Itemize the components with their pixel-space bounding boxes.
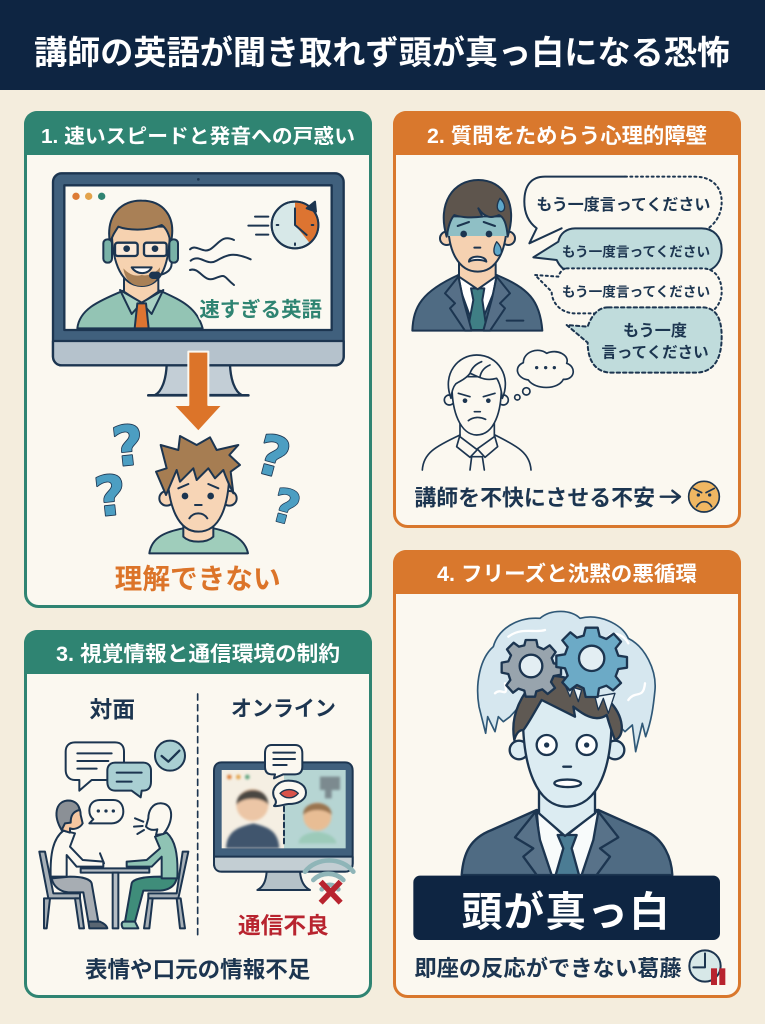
icon: question marks: ? [250,422,297,492]
icon: online monitor [214,745,353,890]
panel 4 illustration [413,611,725,985]
icon: question marks: ? [91,463,130,530]
arrow: to angry face [661,491,680,503]
black bar: mind goes blank [413,876,720,940]
panel 4 heading: 4. フリーズと沈黙の悪循環 [437,562,697,586]
speech bubble 1: もう一度言ってください [536,195,710,214]
icon: angry face [689,481,719,512]
panel 3: visual and network constraints [24,630,372,996]
panel 1: speed and pronunciation [24,111,372,606]
speech bubble 3: もう一度言ってください [562,285,710,300]
panel 3 illustration [39,694,353,982]
panel 2 illustration [412,177,722,512]
icon: anxious learner [412,180,542,331]
icon: paused clock [689,950,725,985]
icon: question marks: ? [109,413,147,480]
icon: question marks: ? [265,479,306,538]
icon: instructor with headset [77,201,203,328]
icon: frozen brain [478,611,655,752]
panel 2 heading: 2. 質問をためらう心理的障壁 [427,125,707,148]
icon: suit and collar [462,810,672,875]
panel 1 illustration [53,173,344,594]
label: cannot understand: 理解できない [115,563,281,594]
speech bubble 3 [535,268,722,313]
label: face to face: 対面 [90,696,135,722]
icon: question marks [91,413,306,538]
icon: sound waves [190,238,251,285]
icon: thought cloud [515,350,573,400]
label: lack of facial information: 表情や口元の情報不足 [85,956,311,982]
icon: gears [502,628,627,697]
icon: displeased instructor [422,355,531,470]
label: online: オンライン [231,697,336,721]
speech bubble 4 [567,307,722,373]
label: inability to react immediately: 即座の反応ができない葛藤 [414,955,682,981]
label: too fast English: 速すぎる英語 [199,298,322,322]
icon: weak wifi with cross [305,860,353,903]
panel 4: freeze and silence [393,550,741,996]
title banner [0,0,765,90]
speech bubble 4: もう一度 [623,321,687,340]
title banner: 講師の英語が聞き取れず頭が真っ白になる恐怖 [34,34,730,71]
label: fear of displeasing the instructor: 講師を不快にさせる不安 [414,485,655,510]
speech bubble 2 [533,228,722,270]
icon: blank-faced person [510,676,624,836]
speech bubble 1 [524,177,722,243]
icon: two people at a table [39,800,188,928]
panel 1 heading: 1. 速いスピードと発音への戸惑い [41,125,355,148]
label: poor connection: 通信不良 [238,912,329,938]
icon: fast clock [248,202,319,248]
speech bubble 4: 言ってください [601,344,709,361]
panel 2: psychological barrier [393,111,741,526]
speech bubble 2: もう一度言ってください [562,245,710,260]
panel 3 heading: 3. 視覚情報と通信環境の制約 [56,643,340,666]
icon: confused learner [149,436,248,553]
icon: meeting chat bubbles [66,741,185,797]
black bar: mind goes blank: 頭が真っ白 [461,889,670,935]
icon: monitor [53,173,344,395]
arrow: down [173,352,223,432]
